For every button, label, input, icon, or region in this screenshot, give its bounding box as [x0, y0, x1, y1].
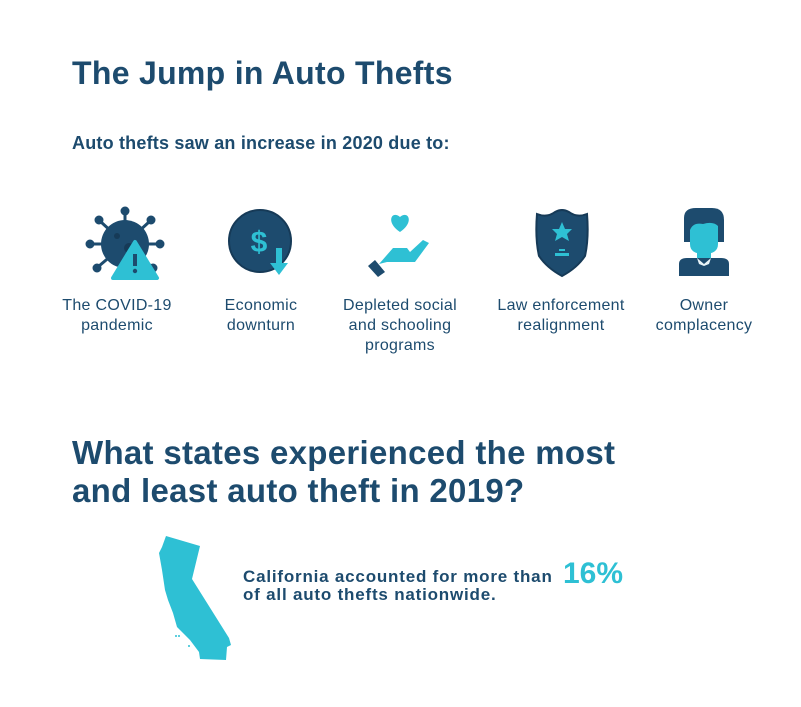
label: law: Law enforcement — [497, 297, 625, 314]
icon: police badge — [535, 209, 589, 278]
stat: 16%: 16% — [563, 557, 623, 590]
label: economic: Economic — [225, 297, 297, 314]
icon: hand with heart — [368, 214, 429, 277]
label: owner: complacency — [656, 317, 752, 334]
label: social: and schooling — [349, 317, 451, 334]
callout: california stat: of all auto thefts nationwide. — [243, 585, 496, 604]
label: covid — [62, 297, 172, 334]
callout: california stat — [243, 567, 553, 604]
map: california — [159, 536, 231, 660]
label: owner: Owner — [680, 297, 728, 314]
subtitle: Auto thefts saw an increase in 2020 due to: — [72, 133, 450, 153]
heading: states: and least auto theft in 2019? — [72, 472, 524, 509]
label: economic: downturn — [227, 317, 295, 334]
label: social: Depleted social — [343, 297, 457, 314]
heading: states: What states experienced the most — [72, 434, 615, 471]
callout: california stat: California accounted for more than — [243, 567, 553, 586]
label: covid: The COVID-19 — [62, 297, 172, 314]
label: law — [497, 297, 625, 334]
label: social — [343, 297, 457, 354]
icon: covid virus — [86, 206, 164, 280]
icon: person — [679, 208, 729, 276]
label: covid: pandemic — [81, 317, 153, 334]
label: owner — [656, 297, 752, 334]
icon: dollar coin down: $ — [251, 226, 268, 259]
label: economic — [225, 297, 297, 334]
heading: states — [72, 434, 615, 509]
icon: dollar coin down — [228, 209, 292, 275]
title: The Jump in Auto Thefts — [72, 55, 453, 91]
label: social: programs — [365, 337, 435, 354]
label: law: realignment — [518, 317, 604, 334]
